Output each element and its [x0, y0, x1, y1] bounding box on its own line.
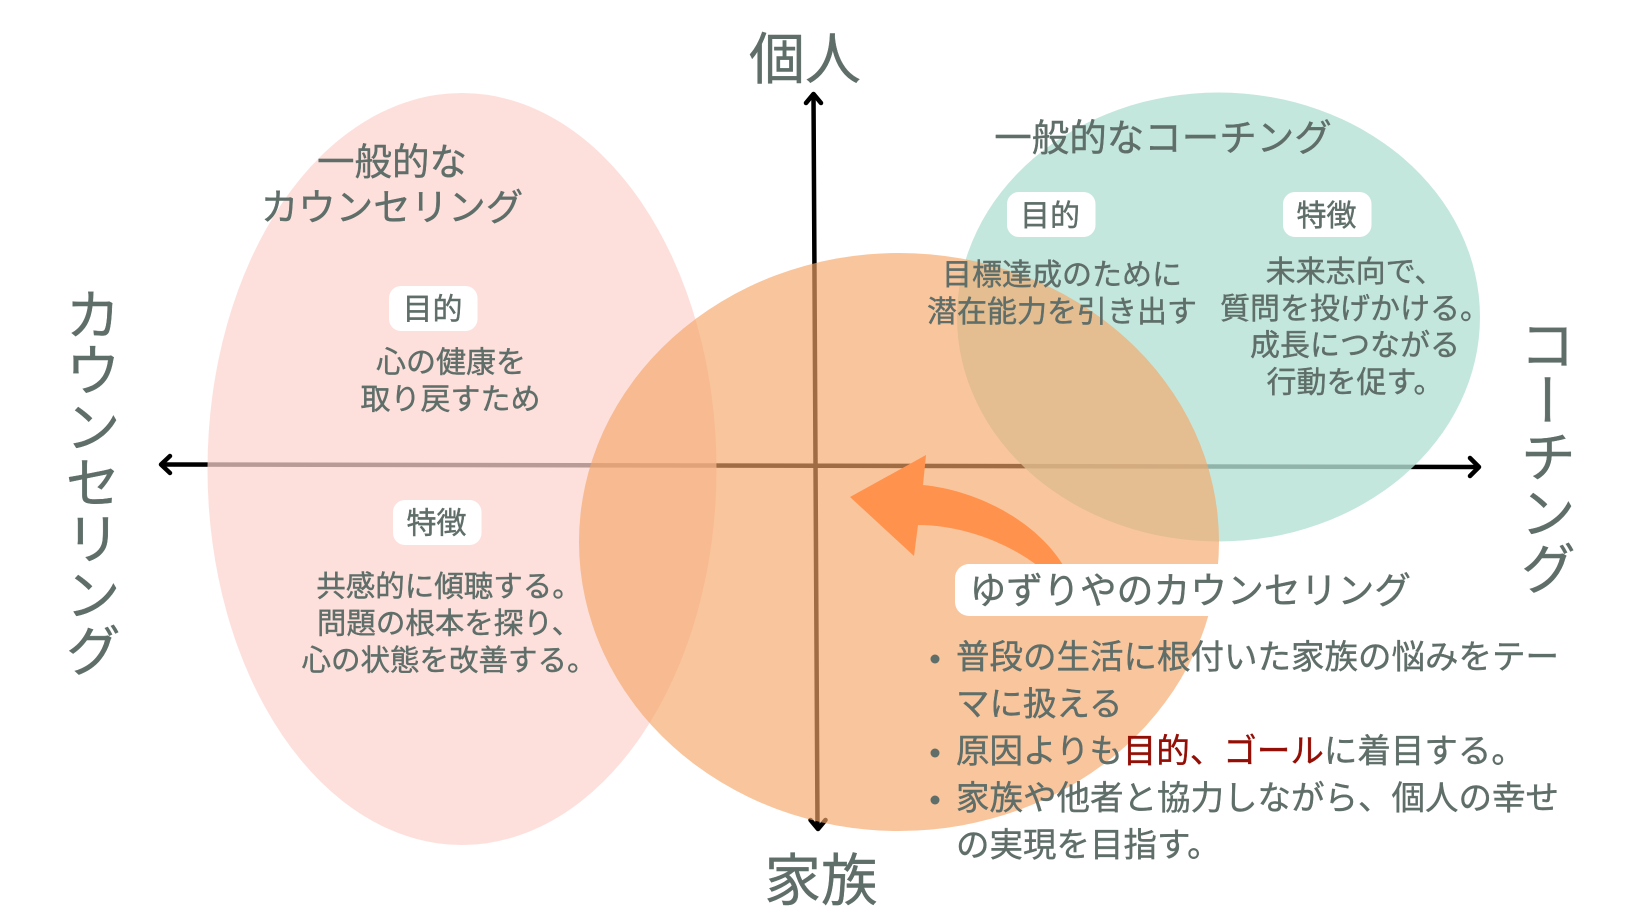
panel title: 一般的な — [317, 141, 467, 183]
purpose text: 心の健康を — [376, 346, 526, 380]
badge: characteristics: 特徴 — [1296, 200, 1356, 233]
heading: 家族: 家族 — [764, 849, 878, 912]
badge: purpose: 目的 — [1020, 200, 1080, 233]
ellipse: yuzuriya counseling — [579, 253, 1219, 831]
characteristics text: 問題の根本を探り、 — [317, 608, 581, 640]
bullet 2: 原因よりも目的、ゴールに着目する。 — [956, 734, 1525, 770]
arrow: coaching toward counseling — [850, 455, 1066, 570]
panel title: 一般的なコーチング — [994, 117, 1332, 159]
characteristics text: 心の状態を改善する。 — [301, 644, 597, 678]
heading badge: ゆずりやのカウンセリング — [970, 570, 1411, 612]
vertical heading: コーチング: コーチング — [1512, 316, 1576, 596]
panel: general coaching — [927, 117, 1490, 400]
horizontal axis: カウンセリング to コーチング — [161, 456, 1479, 476]
ellipse: coaching — [957, 92, 1480, 542]
bullet 1: マに扱える — [956, 686, 1122, 724]
bullet 1 — [930, 640, 1559, 724]
badge: purpose — [1007, 192, 1096, 237]
ellipse: counseling — [208, 93, 716, 845]
panel: general counseling — [261, 141, 597, 678]
bullet 3 — [930, 780, 1559, 864]
badge: purpose — [389, 286, 478, 331]
characteristics text: 質問を投げかける。 — [1220, 293, 1490, 326]
purpose text: 取り戻すため — [360, 384, 540, 416]
panel: yuzuriya counseling — [930, 564, 1559, 864]
characteristics text: 成長につながる — [1250, 330, 1460, 362]
badge: characteristics: 特徴 — [406, 508, 466, 540]
badge: characteristics — [1283, 192, 1372, 237]
vertical axis: 個人 to 家族 — [806, 94, 826, 829]
characteristics text: 共感的に傾聴する。 — [316, 570, 582, 604]
purpose text: 目標達成のために — [942, 259, 1182, 292]
badge: characteristics — [393, 500, 482, 545]
characteristics text: 未来志向で、 — [1266, 256, 1444, 289]
characteristics text: 行動を促す。 — [1266, 366, 1444, 400]
bullet 1: 普段の生活に根付いた家族の悩みをテー — [956, 640, 1559, 676]
purpose text: 潜在能力を引き出す — [927, 296, 1197, 329]
heading: 個人: 個人 — [749, 28, 861, 91]
bullet 3: の実現を目指す。 — [956, 828, 1221, 864]
bullet 3: 家族や他者と協力しながら、個人の幸せ — [956, 780, 1559, 818]
panel title: カウンセリング — [261, 186, 523, 228]
badge: purpose: 目的 — [402, 294, 462, 326]
vertical heading: カウンセリング: カウンセリング — [58, 286, 120, 678]
bullet list — [930, 640, 1559, 864]
